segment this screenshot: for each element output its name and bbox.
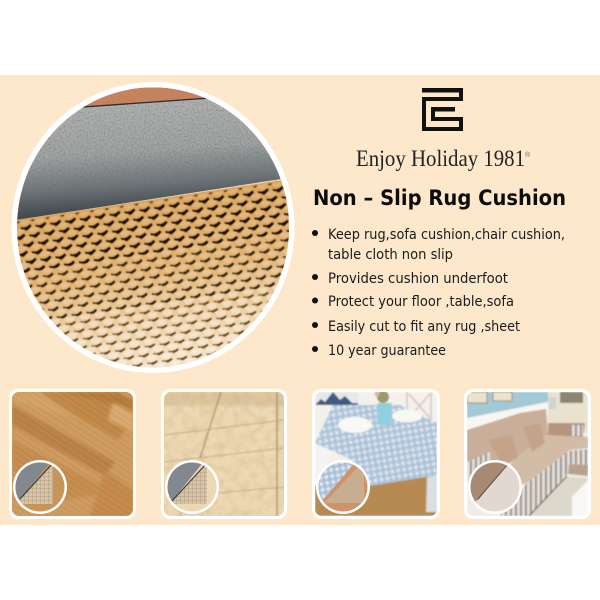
wainscot <box>467 402 548 430</box>
inset: pad under sofa cover <box>468 460 522 514</box>
registered mark: ® <box>525 151 531 159</box>
bullet 2: Provides cushion underfoot <box>328 271 508 287</box>
card: table cloth <box>312 389 440 519</box>
main circle: rug pad close-up <box>12 82 294 373</box>
bullet 4: Easily cut to fit any rug ,sheet <box>328 319 520 335</box>
logo houses <box>315 392 358 405</box>
floor rug <box>530 477 588 516</box>
feature list <box>312 227 565 359</box>
throw pillows <box>489 436 518 462</box>
vase <box>377 403 392 425</box>
bullet 1: Keep rug,sofa cushion,chair cushion, <box>328 227 565 243</box>
bullet 3: Protect your floor ,table,sofa <box>328 294 514 310</box>
card: sofa <box>464 389 591 519</box>
side table <box>572 480 588 516</box>
background panel <box>0 75 600 525</box>
card: tile floor <box>161 389 287 519</box>
right room <box>548 392 588 432</box>
gray rug underside <box>17 88 287 220</box>
striped skirts <box>500 450 570 516</box>
blue wall <box>467 392 548 418</box>
wall pictures <box>467 392 487 403</box>
checked table cloth <box>315 405 437 487</box>
chair <box>315 474 319 488</box>
bullet 1 <box>312 227 565 263</box>
brick floor corner <box>84 88 206 107</box>
brand name: Enjoy Holiday 1981 <box>356 146 525 171</box>
inset: pad on wood <box>13 460 67 514</box>
bullet 1: table cloth non slip <box>328 247 453 263</box>
plates <box>338 417 372 433</box>
sofa base <box>467 408 549 464</box>
card: wood floor <box>9 389 136 519</box>
beige mat <box>17 180 289 368</box>
inset: pad on tile <box>165 460 219 514</box>
product title: Non – Slip Rug Cushion <box>313 186 566 211</box>
sofa arm <box>548 423 585 437</box>
wood floor <box>315 475 437 516</box>
inset: pad under cloth <box>316 460 370 514</box>
brand logo <box>422 88 463 131</box>
bullet 5: 10 year guarantee <box>328 343 446 359</box>
sofa seat <box>510 434 588 485</box>
